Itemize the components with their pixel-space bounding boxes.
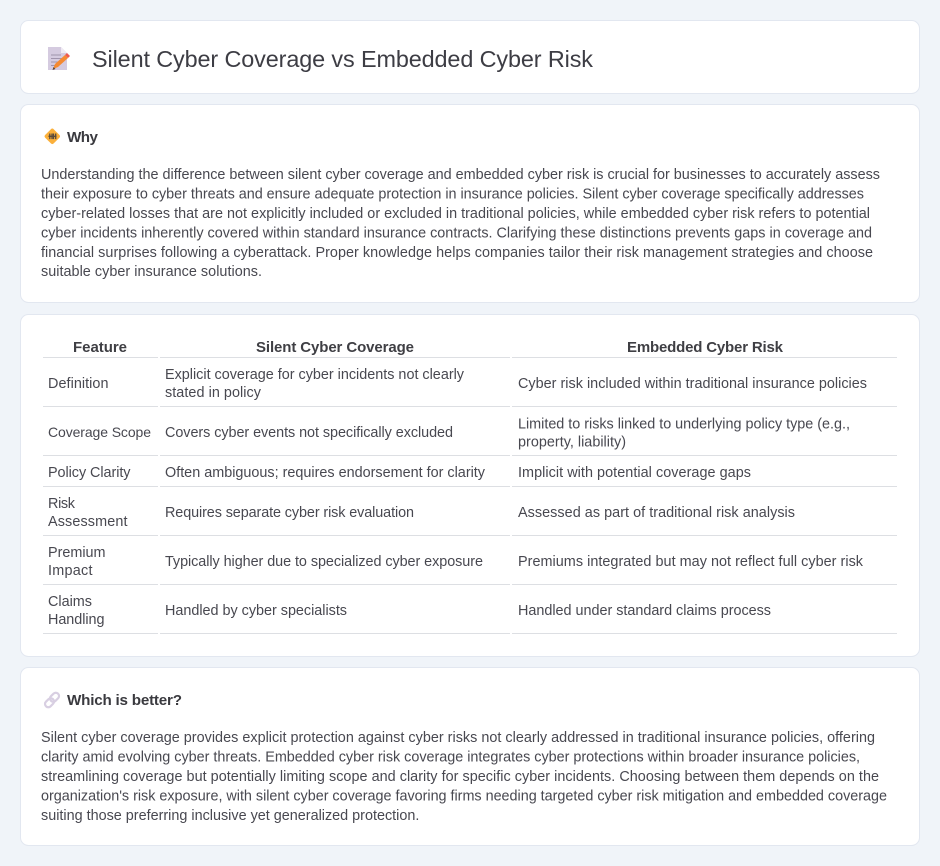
row: coverage scope: Limited to risks linked to underlying policy type (e.g., [518, 416, 850, 432]
row: definition: Cyber risk included within traditional insurance policies [518, 376, 867, 392]
row: claims handling: Handled by cyber specialists [165, 603, 347, 619]
text block: why paragraph [41, 167, 880, 280]
text block: which is better paragraph: streamlining coverage but potentially limiting scope and clarity for specific cyber incidents. Choosing between them depends on the [41, 769, 879, 785]
row: risk assessment: Risk [48, 496, 76, 512]
row: premium impact: Impact [48, 563, 92, 579]
table header [73, 339, 784, 356]
heading: why: Why [67, 129, 99, 146]
text block: which is better paragraph: suiting those preferring inclusive yet generalized protection. [41, 808, 419, 824]
table header: Silent Cyber Coverage [256, 339, 414, 356]
row: coverage scope: property, liability) [518, 434, 626, 450]
row: definition: Explicit coverage for cyber incidents not clearly [165, 367, 465, 383]
text block: why paragraph: financial surprises following a cyberattack. Proper knowledge helps companies tailor their risk management strategies and choose [41, 245, 873, 261]
row: risk assessment: Requires separate cyber risk evaluation [165, 505, 414, 521]
row: coverage scope: Coverage Scope [48, 424, 151, 440]
row: risk assessment [48, 496, 795, 530]
row: claims handling: Claims [48, 594, 92, 610]
row: policy clarity [48, 465, 751, 481]
text block: why paragraph: their exposure to cyber threats and ensure adequate protection in insurance policies. Silent cyber coverage specifically addresses [41, 186, 864, 202]
row: premium impact: Premium [48, 545, 106, 561]
text block: which is better paragraph [41, 730, 887, 824]
text block: which is better paragraph: organization's risk exposure, with silent cyber coverage favoring firms needing targeted cyber risk mitigation and embedded coverage [41, 788, 887, 804]
table header: Embedded Cyber Risk [627, 339, 784, 356]
row: claims handling: Handling [48, 612, 104, 628]
row: coverage scope [48, 416, 850, 450]
title: Silent Cyber Coverage vs Embedded Cyber Risk [92, 46, 593, 72]
panel: why [20, 104, 920, 302]
text block: why paragraph: cyber incidents inherently covered within standard insurance contracts. Clarifying these distinctions prevents gaps in coverage and [41, 225, 872, 241]
icon: document with pencil [48, 47, 70, 70]
row: definition: Definition [48, 376, 108, 392]
row: coverage scope: Covers cyber events not specifically excluded [165, 425, 453, 441]
row: claims handling [48, 594, 771, 628]
row: premium impact: Typically higher due to specialized cyber exposure [165, 554, 483, 570]
panel: which is better [20, 668, 920, 846]
panel: title card [20, 20, 920, 94]
row: claims handling: Handled under standard claims process [518, 603, 771, 619]
text block: why paragraph: cyber-related losses that are not explicitly included or excluded in traditional policies, while embedded cyber risk refers to potential [41, 206, 870, 222]
table header: Feature [73, 339, 127, 356]
icon: warning diamond [44, 128, 61, 145]
row: definition: stated in policy [165, 385, 262, 401]
row: policy clarity: Implicit with potential coverage gaps [518, 465, 751, 481]
row: risk assessment: Assessed as part of traditional risk analysis [518, 505, 795, 521]
text block: which is better paragraph: Silent cyber coverage provides explicit protection against cyber risks not clearly addressed in traditional insurance policies, offering [41, 730, 875, 746]
row: policy clarity: Policy Clarity [48, 465, 131, 481]
row: risk assessment: Assessment [48, 514, 128, 530]
text block: why paragraph: Understanding the difference between silent cyber coverage and embedded cyber risk is crucial for businesses to accurately assess [41, 167, 880, 183]
heading: which is better: Which is better? [67, 692, 182, 709]
text block: which is better paragraph: clarity amid evolving cyber threats. Embedded cyber risk coverage integrates cyber protections within broader insurance policies, [41, 750, 860, 766]
row: policy clarity: Often ambiguous; requires endorsement for clarity [165, 465, 486, 481]
icon: link [44, 691, 60, 709]
row: definition [48, 367, 867, 401]
panel: comparison table [20, 314, 920, 656]
text block: why paragraph: suitable cyber insurance solutions. [41, 264, 262, 280]
row: premium impact [48, 545, 864, 579]
row: premium impact: Premiums integrated but may not reflect full cyber risk [518, 554, 864, 570]
